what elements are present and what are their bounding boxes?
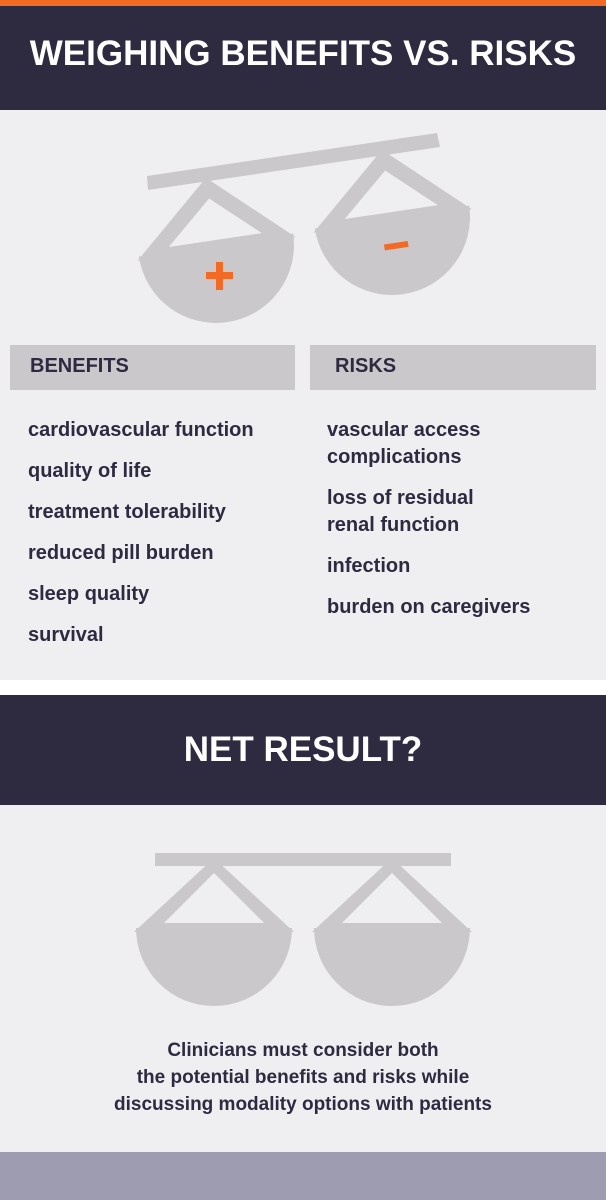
conclusion text: the potential benefits and risks while [137, 1067, 469, 1088]
risks list: complications [327, 446, 461, 468]
risks list: infection [327, 555, 410, 577]
benefits list: sleep quality [28, 583, 149, 605]
icon: tilted scale [138, 133, 472, 323]
top accent bar [0, 0, 606, 6]
risks list: renal function [327, 514, 459, 536]
conclusion text: discussing modality options with patients [114, 1094, 492, 1115]
benefits list: quality of life [28, 460, 151, 482]
net result banner: NET RESULT? [184, 730, 422, 769]
bottom band [0, 1152, 606, 1200]
conclusion text: Clinicians must consider both [167, 1040, 439, 1061]
risks list [327, 419, 530, 618]
heading: benefits [10, 345, 295, 390]
panel: conclusion [0, 805, 606, 1152]
benefits list: treatment tolerability [28, 501, 226, 523]
benefits list: reduced pill burden [28, 542, 214, 564]
conclusion text [114, 1040, 492, 1115]
net result banner [0, 695, 606, 805]
heading: benefits: BENEFITS [30, 355, 129, 377]
risks list: burden on caregivers [327, 596, 530, 618]
panel: comparison [0, 110, 606, 680]
title banner [0, 6, 606, 110]
risks list: vascular access [327, 419, 480, 441]
heading: risks: RISKS [335, 355, 396, 377]
heading: risks [310, 345, 596, 390]
icon: balanced scale [134, 853, 472, 1006]
benefits list [28, 419, 254, 646]
benefits list: cardiovascular function [28, 419, 254, 441]
title banner: WEIGHING BENEFITS VS. RISKS [30, 34, 576, 73]
benefits list: survival [28, 624, 104, 646]
risks list: loss of residual [327, 487, 474, 509]
